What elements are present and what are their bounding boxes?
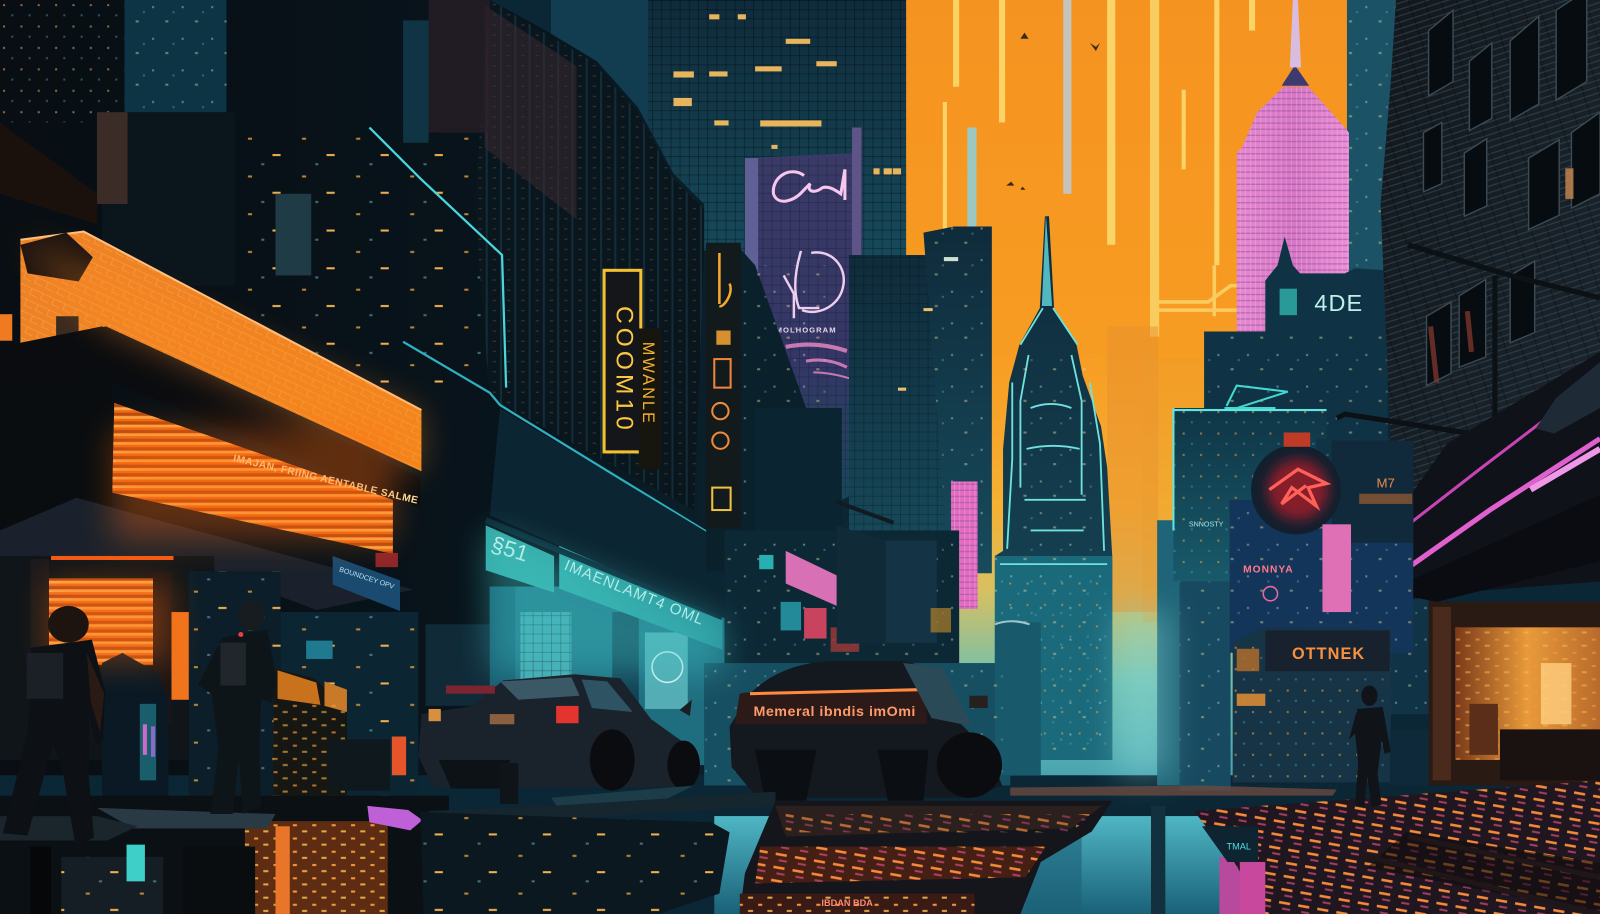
orange atmospheric glow: [20, 240, 421, 663]
person with backpack: [3, 606, 105, 846]
car rear neon text: Memeral ibndis imOmi: [753, 704, 916, 720]
yellow neon vertical sign: [604, 270, 661, 469]
dark balcony over teal billboards: [490, 408, 724, 618]
teal building with rooftop neon: SNNOSTY: [1189, 520, 1224, 528]
neon sign: circular D logo: [784, 251, 844, 318]
teal neon billboards: IMAENLAMT4 OML: [562, 557, 707, 629]
teal neon billboards: §51: [488, 532, 531, 567]
central stepped block with orange lights: IBDAN BDA: [821, 898, 873, 908]
red neon circle sign tower: [1230, 433, 1413, 653]
yellow neon vertical sign: MWANLE: [639, 342, 657, 425]
central reflection water: [714, 806, 1270, 914]
pink-rail elevated walkway: [1386, 352, 1600, 602]
dark lower city foreground on left: [0, 796, 449, 914]
storefront with warm interior: [1429, 602, 1600, 785]
neon text: 4DE: 4DE: [1314, 290, 1363, 316]
street haze and distant towers: [704, 621, 1041, 785]
central spired tower: [995, 214, 1112, 760]
left floating block with lit windows: [420, 812, 730, 914]
yellow neon vertical sign: COOM10: [610, 306, 637, 434]
teal towers beside logo tower: [849, 226, 992, 609]
left dark facade mass: [0, 0, 883, 775]
main center towers: [551, 0, 906, 265]
orange neon striped billboard: [112, 403, 419, 554]
sign caption: MOLHOGRAM: [776, 326, 837, 335]
raised platforms and beams: [429, 785, 1337, 826]
dark eave under billboard: [0, 326, 420, 508]
orange shuttered storefront: [0, 556, 214, 760]
tall dark sign with orange glyphs: [706, 243, 842, 602]
orange neon caption: M7: [1377, 476, 1395, 491]
structural frame around billboard: [0, 374, 112, 538]
billboard text: IMAJAN, FRIING AENTABLE SALME: [232, 453, 419, 507]
teal glow behind billboards: [426, 587, 724, 765]
orange sky with light streaks: [903, 0, 1362, 775]
skyline block right of spire: [1316, 439, 1429, 714]
building with OTTNEK sign: OTTNEK: [1292, 645, 1365, 663]
building with OTTNEK sign: [1233, 627, 1429, 785]
pink skyscraper with antenna: [1237, 0, 1349, 332]
right dark brick building: [1337, 0, 1600, 592]
teal building with rooftop neon: [1173, 386, 1327, 581]
mid skyline behind figures: [102, 571, 418, 816]
first car on pedestal: [418, 674, 700, 804]
person standing center-left: [198, 600, 277, 814]
lower right neon rooftops: TMAL: [1227, 842, 1251, 852]
second car with red neon text: [730, 661, 1002, 801]
metal bracket arm: [1337, 245, 1600, 435]
blue street sign: BOUNDCEY OPV: [338, 566, 395, 591]
platform under figures: [0, 808, 276, 841]
canopy over street: [0, 498, 413, 610]
central stepped block with orange lights: [740, 801, 1112, 914]
building with 4DE sign: [1204, 237, 1408, 449]
right side street signs cluster: [724, 500, 959, 765]
roof mounted box: [20, 233, 93, 282]
red sign text: MONNYA: [1243, 564, 1294, 575]
lone figure on right: [1349, 686, 1391, 807]
background pale buildings in the haze: [1157, 520, 1231, 791]
teal atmospheric glow: [486, 530, 1168, 775]
teal neon billboards: [486, 520, 722, 650]
neon logo tower: [745, 122, 862, 520]
lower right neon rooftops: [1194, 780, 1600, 914]
neon sign: script logo: [773, 169, 845, 201]
neon edge lines: [369, 128, 724, 543]
blue street sign: [333, 553, 400, 611]
orange billboard roof: [0, 232, 421, 471]
icon: flying drones: [1006, 33, 1100, 190]
tall teal tower upper right: [1347, 0, 1408, 306]
